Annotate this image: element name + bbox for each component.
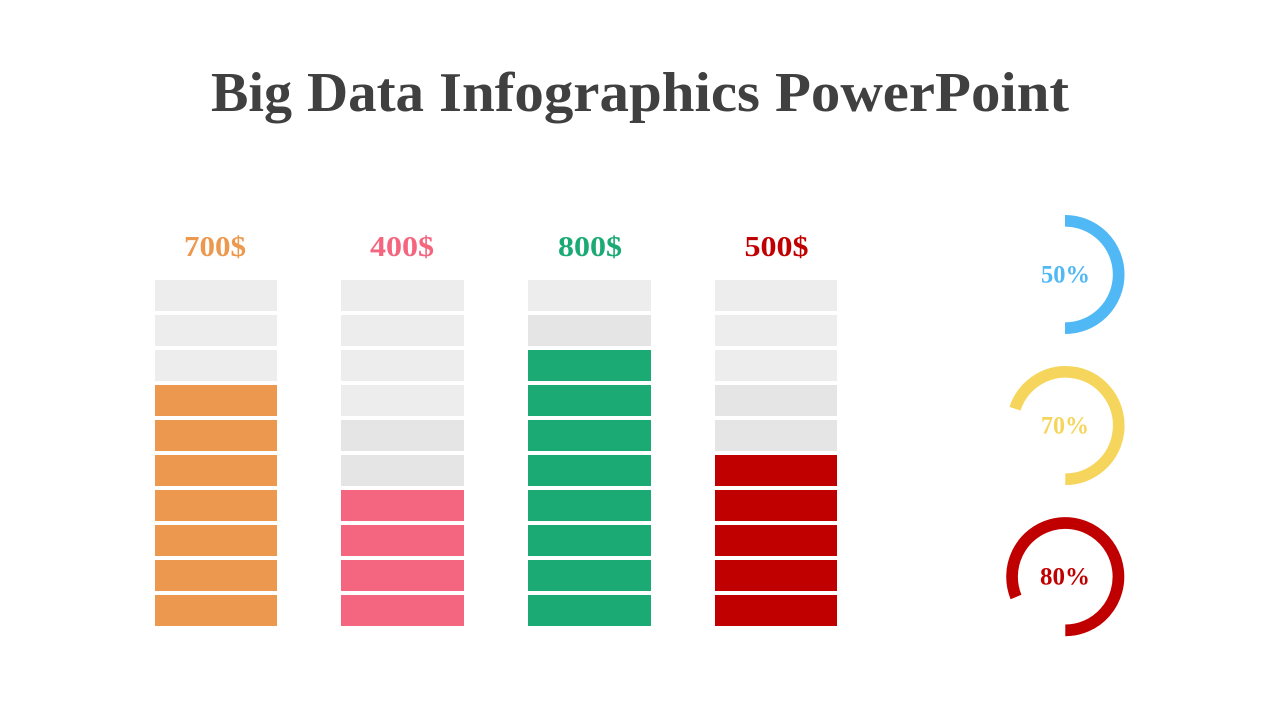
ring value: 70%: 70% [1041,412,1089,440]
value label: 400$: 400$ [370,232,434,263]
title: Infographics [439,62,760,124]
title: Data [307,62,424,124]
ring gauge: 70% [1015,372,1119,479]
bar column: 500$ [715,232,837,626]
ring value: 80%: 80% [1040,564,1090,590]
ring gauge: 50% [1041,221,1119,328]
bar column: 800$ [528,232,651,626]
value label: 700$: 700$ [184,232,246,263]
value label: 800$: 800$ [558,232,622,263]
bar column: 400$ [341,232,464,626]
title: Big [211,62,292,124]
ring value: 50%: 50% [1041,262,1090,288]
ring gauge: 80% [1012,523,1118,630]
value label: 500$: 500$ [744,232,808,263]
bar column: 700$ [155,232,277,626]
title: PowerPoint [775,62,1069,124]
